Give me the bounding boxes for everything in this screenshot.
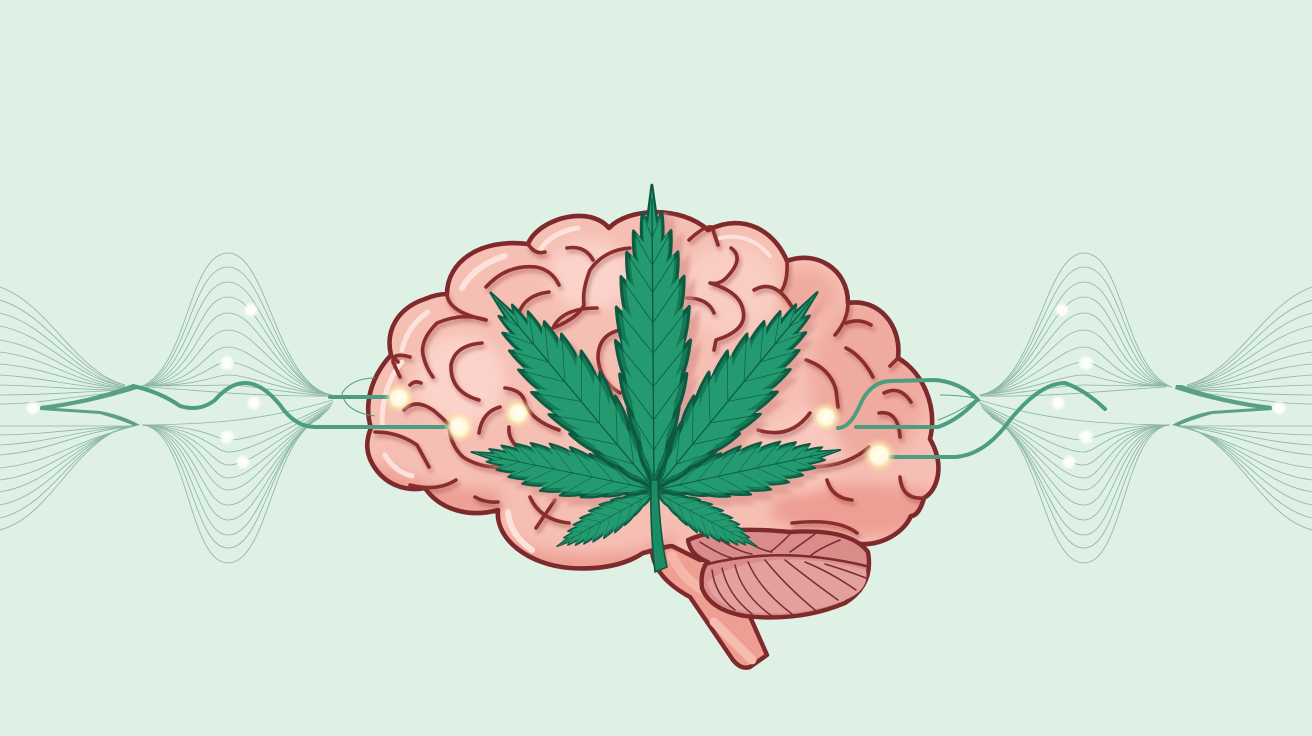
brain sulci xyxy=(375,227,924,533)
right neural wave bundle xyxy=(979,253,1312,563)
brainstem xyxy=(652,535,767,668)
upper right leaflet xyxy=(629,272,843,511)
lower right leaflet xyxy=(647,478,764,560)
middle left leaflet xyxy=(467,428,660,514)
right wave taper strokes xyxy=(1172,385,1272,426)
brain cerebrum xyxy=(367,212,950,590)
lower left leaflet xyxy=(549,478,663,560)
leaf stem xyxy=(651,480,667,572)
left main signal wire xyxy=(133,383,448,427)
right wave dots xyxy=(1050,302,1287,470)
left wave dots xyxy=(25,302,262,470)
right signal wires xyxy=(838,380,1105,457)
thin loop left xyxy=(342,378,375,416)
cannabis leaf xyxy=(466,186,845,572)
sulci cel shading xyxy=(377,230,926,536)
left wave taper strokes xyxy=(40,385,140,426)
top leaflet xyxy=(614,186,691,490)
left neural wave bundle xyxy=(0,253,333,563)
brain highlights xyxy=(382,228,770,550)
leaf shadow xyxy=(480,212,842,508)
left signal wire to node one xyxy=(330,395,388,399)
brain shading xyxy=(370,230,950,590)
glowing nodes xyxy=(384,383,896,472)
brain outline xyxy=(367,212,938,568)
cerebellum folds xyxy=(700,534,866,616)
middle right leaflet xyxy=(650,426,845,514)
cerebellum xyxy=(688,530,869,617)
upper left leaflet xyxy=(466,272,681,511)
